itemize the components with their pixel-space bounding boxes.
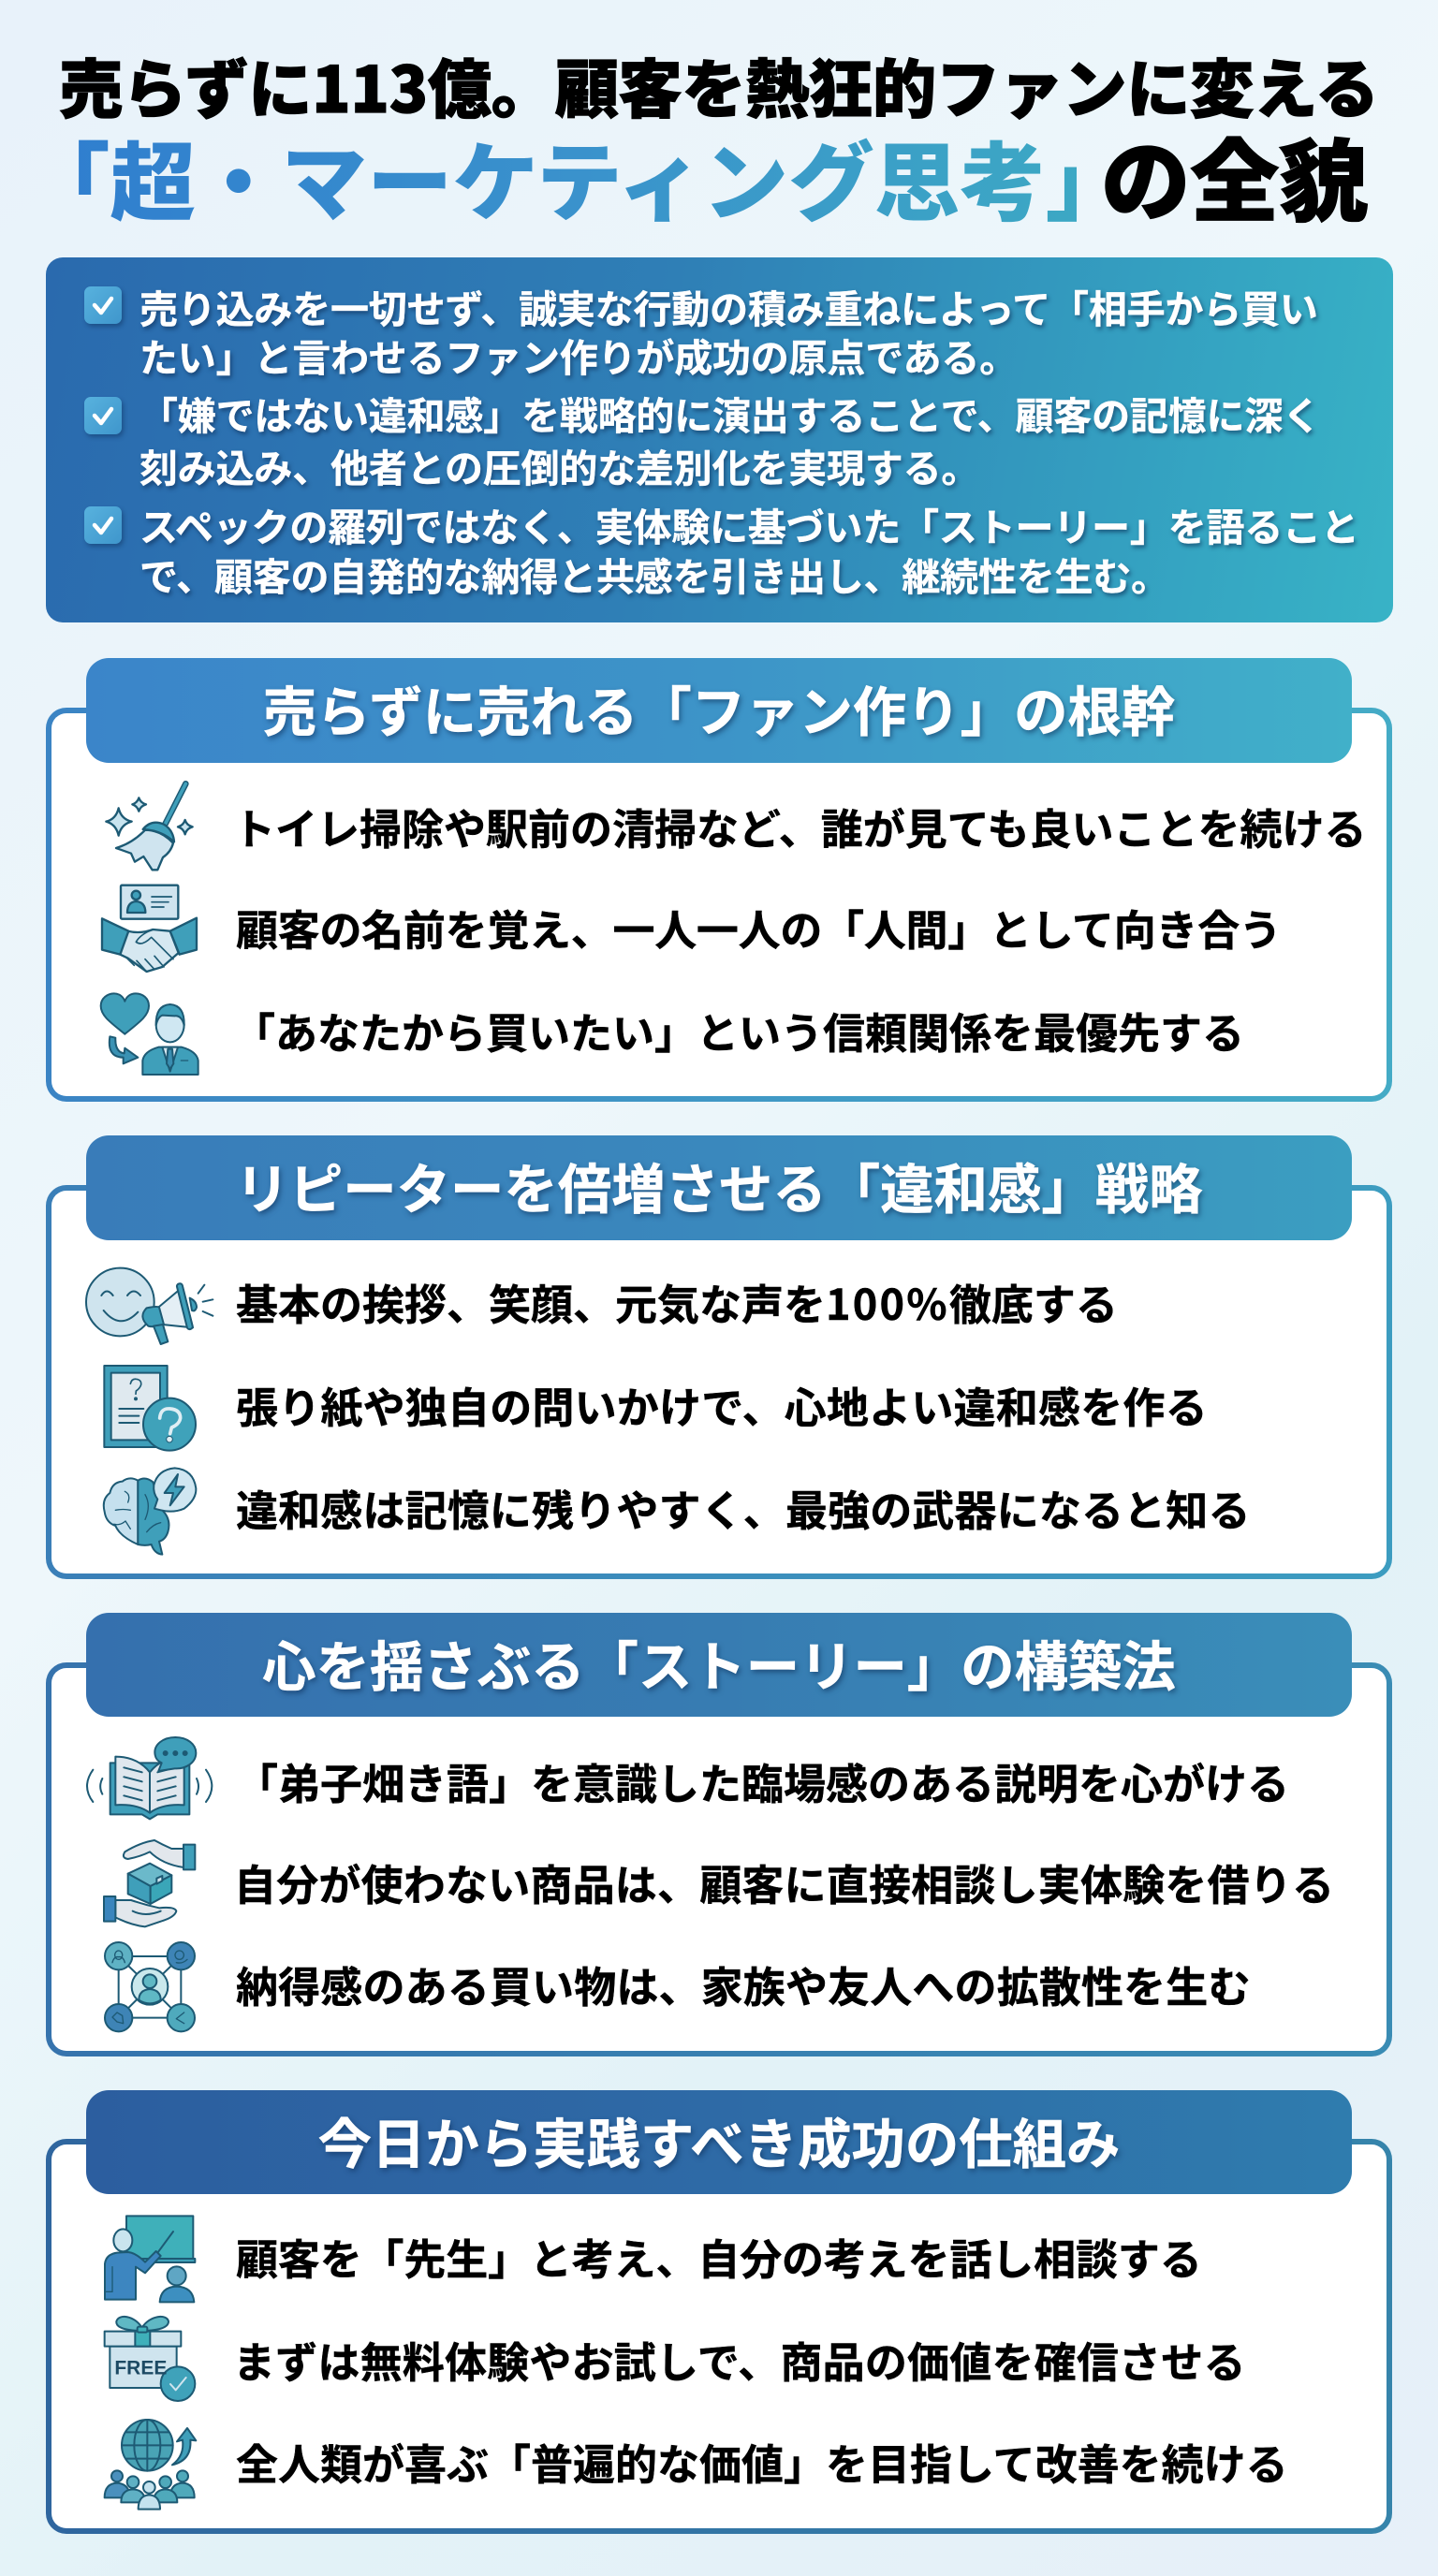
item text 2-3: 違和感は記憶に残りやすく、最強の武器になると知る <box>236 1477 1251 1538</box>
icon: smiley with megaphone <box>85 1267 213 1345</box>
summary point 3: スペックの羅列ではなく、実体験に基づいた「ストーリー」を語ること <box>139 496 1359 552</box>
item text 4-3: 全人類が喜ぶ「普遍的な価値」を目指して改善を続ける <box>236 2431 1288 2492</box>
icon: hands offering a box <box>103 1839 197 1928</box>
summary point 2 <box>139 385 1321 493</box>
summary point 2: 「嫌ではない違和感」を戦略的に演出することで、顧客の記憶に深く <box>139 385 1321 441</box>
summary point 1 <box>139 278 1320 383</box>
summary point 3: で、顧客の自発的な納得と共感を引き出し、継続性を生む。 <box>139 546 1169 602</box>
icon: brain with lightning <box>103 1467 197 1556</box>
icon: handshake with ID card <box>101 884 198 973</box>
summary point 1: 売り込みを一切せず、誠実な行動の積み重ねによって「相手から買い <box>139 278 1318 334</box>
item text 4-2: まずは無料体験やお試しで、商品の価値を確信させる <box>233 2329 1246 2390</box>
heading: fan building <box>86 658 1352 763</box>
heading: repeaters: リピーターを倍増させる「違和感」戦略 <box>235 1146 1203 1224</box>
summary checkbox 3 <box>84 506 122 544</box>
panel: practice <box>46 2139 1392 2534</box>
summary point 2: 刻み込み、他者との圧倒的な差別化を実現する。 <box>139 437 979 493</box>
item text 3-3: 納得感のある買い物は、家族や友人への拡散性を生む <box>236 1954 1251 2014</box>
item text 1-1: トイレ掃除や駅前の清掃など、誰が見ても良いことを続ける <box>233 796 1367 856</box>
title <box>24 38 1379 240</box>
item text 1-2: 顧客の名前を覚え、一人一人の「人間」として向き合う <box>236 897 1282 958</box>
icon: open book with speech bubble <box>86 1736 213 1820</box>
icon: broom with sparkles <box>105 781 194 871</box>
heading: repeaters <box>86 1135 1352 1240</box>
icon: free gift box with check: FREE <box>114 2357 167 2378</box>
icon: teacher at a board <box>104 2215 197 2303</box>
summary checkbox 2 <box>84 397 122 434</box>
summary point 1: たい」と言わせるファン作りが成功の原点である。 <box>139 327 1018 383</box>
heading: practice <box>86 2090 1352 2194</box>
item text 3-1: 「弟子畑き語」を意識した臨場感のある説明を心がける <box>236 1750 1289 1811</box>
item text 4-1: 顧客を「先生」と考え、自分の考えを話し相談する <box>236 2226 1202 2287</box>
summary point 3 <box>139 496 1359 602</box>
icon: heart and business person <box>99 992 199 1076</box>
item text 2-1: 基本の挨拶、笑顔、元気な声を100%徹底する <box>236 1271 1118 1332</box>
panel: summary <box>46 257 1393 622</box>
title line 1: 売らずに113億。顧客を熱狂的ファンに変える <box>59 38 1379 131</box>
icon: globe and crowd <box>103 2419 197 2510</box>
icon: free gift box with check <box>103 2316 197 2402</box>
icon: poster with question mark <box>103 1365 197 1452</box>
item text 3-2: 自分が使わない商品は、顧客に直接相談し実体験を借りる <box>234 1852 1334 1912</box>
heading: story <box>86 1613 1352 1717</box>
panel: fan building <box>46 708 1392 1102</box>
icon: people network <box>104 1941 196 2033</box>
item text 1-3: 「あなたから買いたい」という信頼関係を最優先する <box>233 1000 1244 1061</box>
item text 2-2: 張り紙や独自の問いかけで、心地よい違和感を作る <box>236 1374 1208 1435</box>
heading: fan building: 売らずに売れる「ファン作り」の根幹 <box>263 668 1175 747</box>
heading: practice: 今日から実践すべき成功の仕組み <box>318 2100 1120 2179</box>
summary checkbox 1 <box>84 286 122 324</box>
panel: story <box>46 1662 1392 2056</box>
panel: repeaters <box>46 1185 1392 1579</box>
heading: story: 心を揺さぶる「ストーリー」の構築法 <box>262 1623 1176 1702</box>
title line 2: 「超・マーケティング思考」の全貌 <box>24 111 1368 240</box>
